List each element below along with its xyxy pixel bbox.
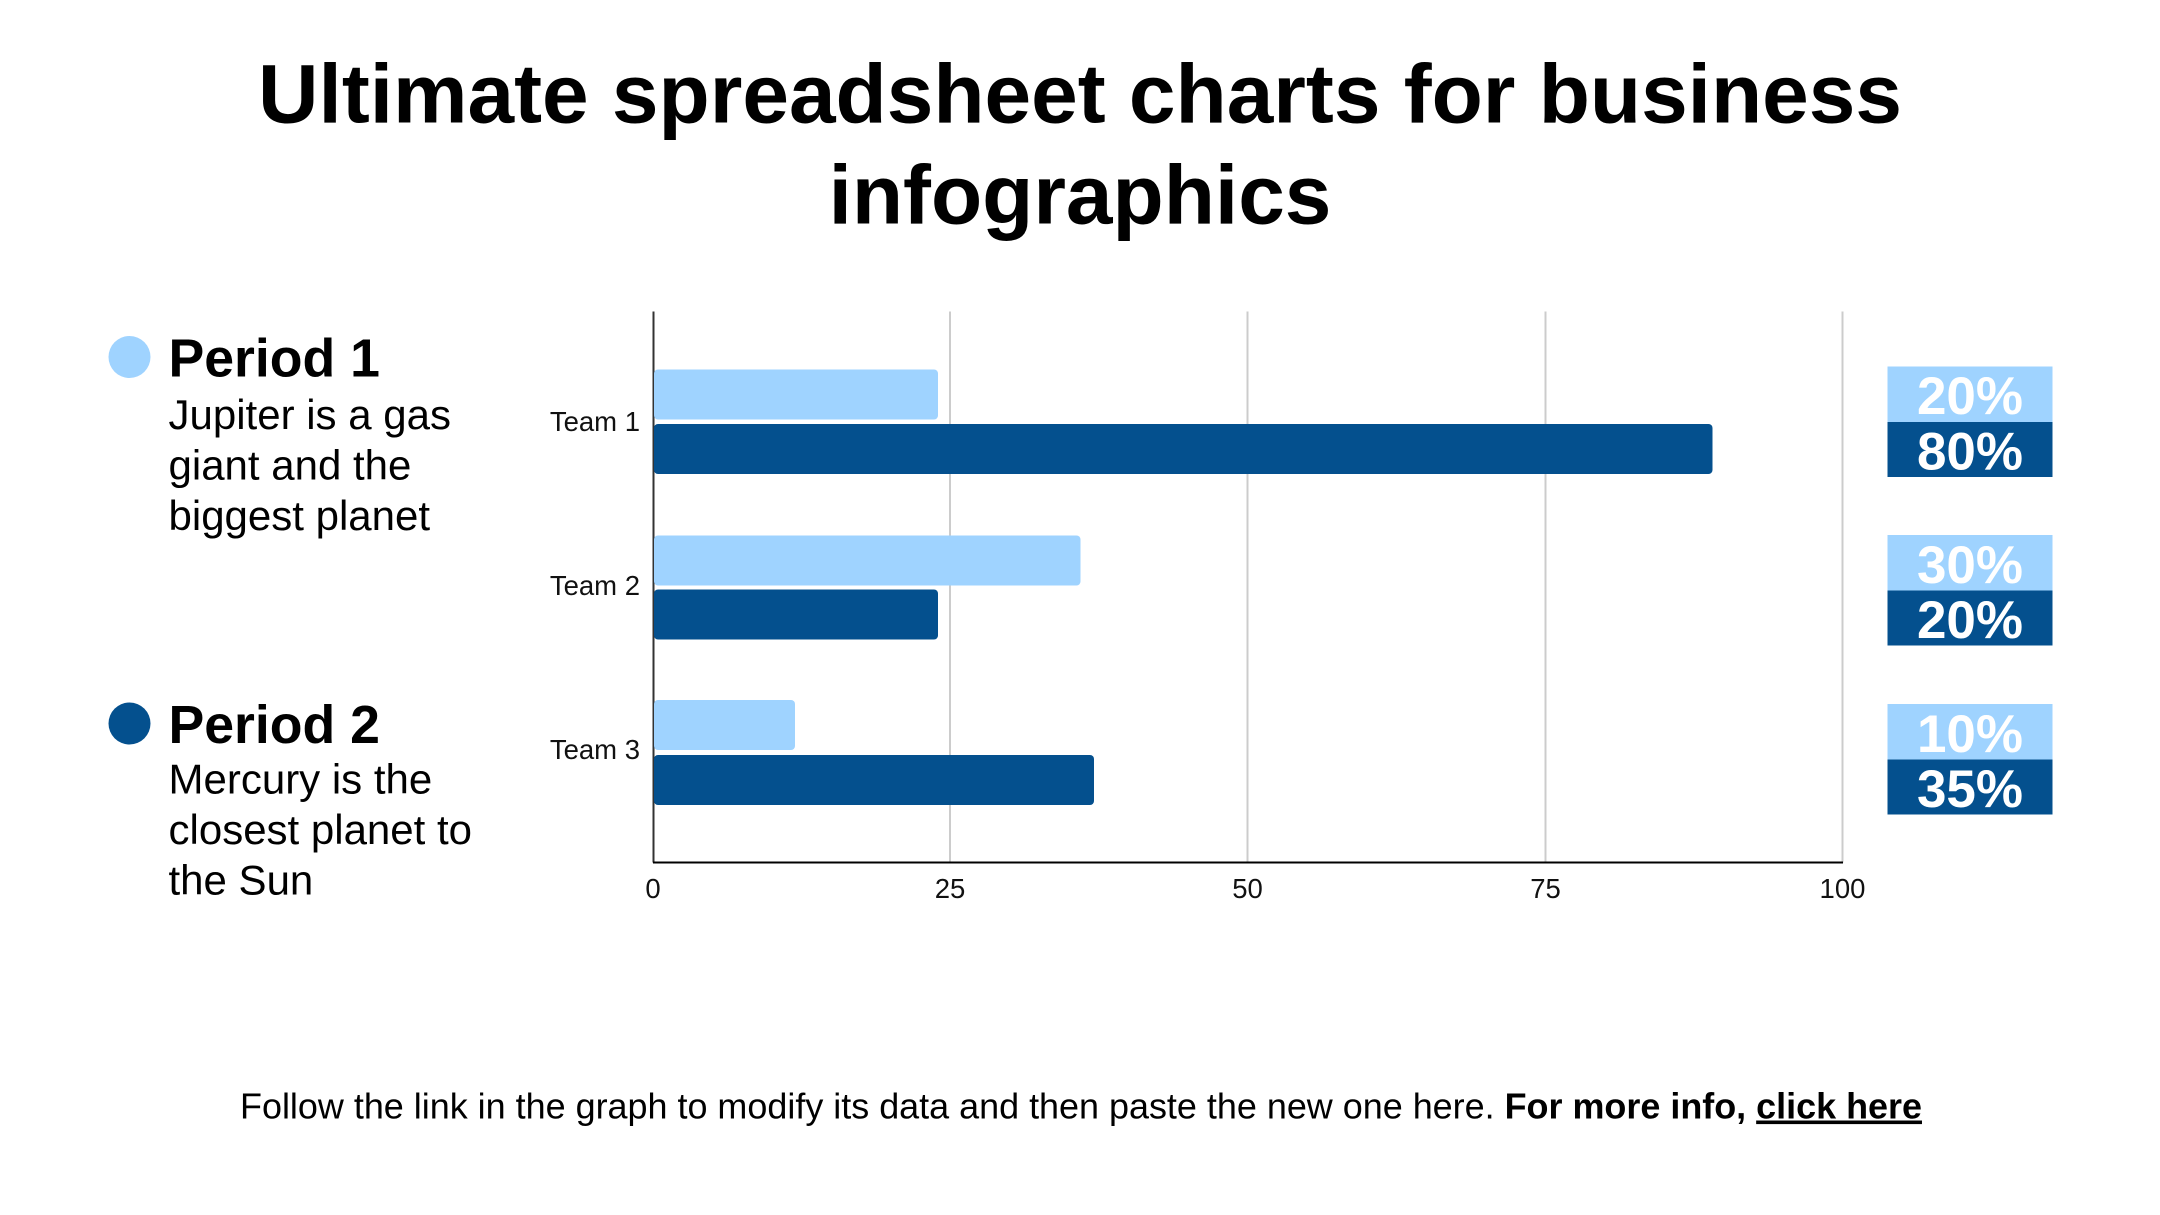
legend: period 2 xyxy=(108,695,472,904)
footer note: Follow the link in the graph to modify its data and then paste the new one here. For more info, click here xyxy=(240,1086,1922,1126)
axis labels: 0 xyxy=(645,873,661,904)
percent: team 3: 10% xyxy=(1917,705,2023,764)
percent: team 3 xyxy=(1888,704,2052,819)
legend: period 1: Period 1 xyxy=(168,328,380,388)
axis labels: 75 xyxy=(1530,873,1561,904)
legend: period 1: biggest planet xyxy=(168,492,430,539)
title: infographics xyxy=(829,148,1331,242)
category labels: Team 3 xyxy=(550,734,640,765)
percent: team 3: 35% xyxy=(1917,760,2023,819)
bars: team 1 xyxy=(654,370,1712,474)
bars: team 3 xyxy=(654,700,1094,805)
percent: team 2 xyxy=(1888,535,2052,650)
percent: team 2: 20% xyxy=(1917,591,2023,650)
category labels: Team 1 xyxy=(550,406,640,437)
axis labels: 100 xyxy=(1820,873,1865,904)
legend: period 1: giant and the xyxy=(168,442,411,488)
legend: period 1: Jupiter is a gas xyxy=(168,391,451,438)
percent: team 1: 20% xyxy=(1917,367,2023,426)
legend: period 2: Period 2 xyxy=(168,695,380,755)
legend: period 1 xyxy=(108,328,451,539)
legend: period 2: closest planet to xyxy=(168,806,472,853)
legend: period 2: Mercury is the xyxy=(168,756,432,802)
category labels: Team 2 xyxy=(550,570,640,601)
panel: legend xyxy=(108,328,472,904)
axis labels xyxy=(645,873,1865,904)
percent: team 2: 30% xyxy=(1917,536,2023,595)
percent: team 1 xyxy=(1888,366,2052,482)
axis labels: 50 xyxy=(1232,873,1263,904)
title: Ultimate spreadsheet charts for business xyxy=(258,46,1902,140)
axis labels: 25 xyxy=(935,873,965,904)
category labels xyxy=(550,406,640,765)
bars: team 2 xyxy=(654,536,1080,640)
bar chart xyxy=(550,312,1865,904)
legend: period 2: the Sun xyxy=(168,856,313,904)
title xyxy=(258,46,1902,242)
percent: team 1: 80% xyxy=(1917,422,2023,482)
percent boxes xyxy=(1888,366,2052,819)
